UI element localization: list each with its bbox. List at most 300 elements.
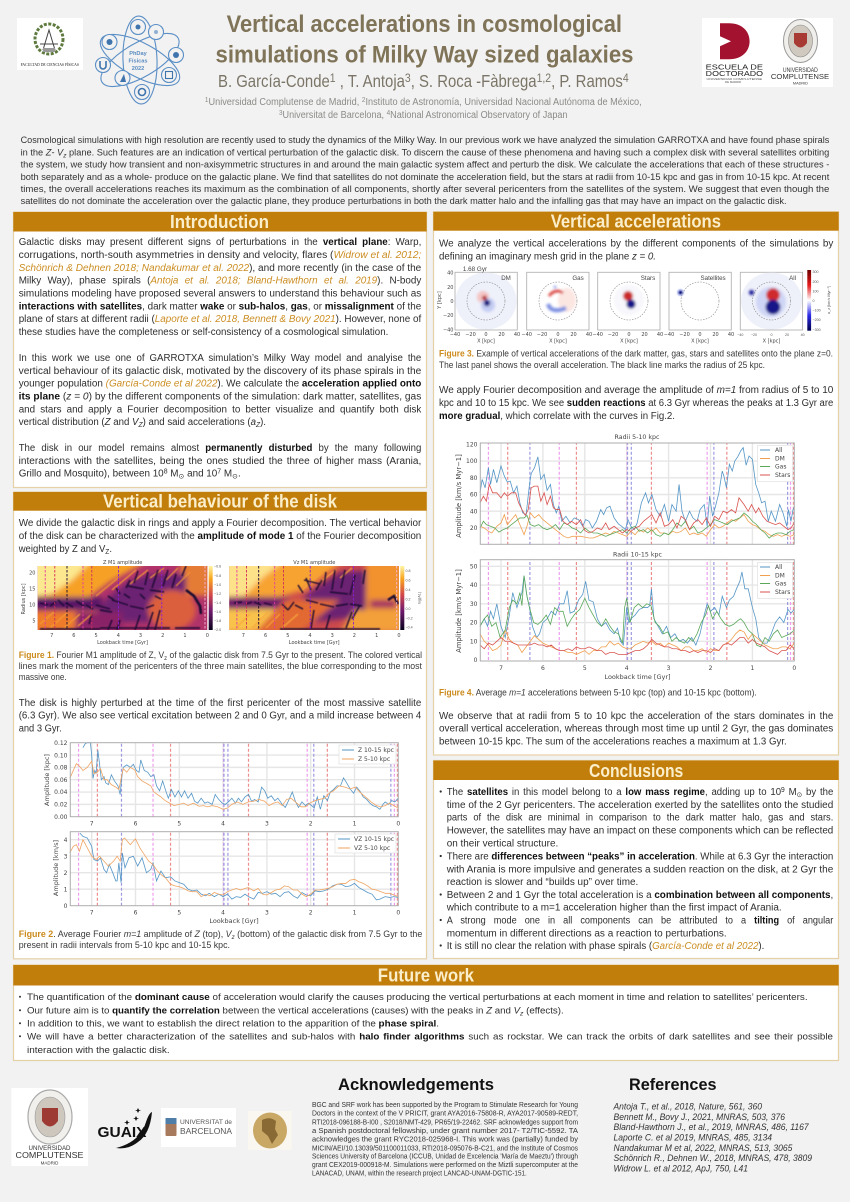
title, axes and colorbar: −1.0: [214, 583, 221, 587]
affiliations: 2: [362, 97, 366, 104]
text: introduction paragraphs: The disk in our model remains almost permanently disturbed by the many following: [19, 443, 421, 454]
title, axes and colorbar: 2: [161, 633, 164, 639]
line chart: Radii 10-15 kpc: 50: [470, 564, 478, 570]
text: introduction paragraphs: M: [221, 469, 232, 480]
abstract: the system, we study how transient and non-axisymmetric structures in and around the main galactic system affect and perturb the disk. We calculate the accelerations that each of these structures -: [21, 160, 829, 171]
line chart: Vz amplitude: 1: [353, 910, 357, 916]
title, axes and colorbar: 1: [183, 633, 187, 639]
map: gas: Gas: [572, 275, 584, 282]
text: acknowledgements: Doctors in the context of the V PRICIT, grant AYA2016-75808-R, AYA2017-90589-REDT,: [312, 1111, 578, 1118]
logo: Universidad Complutense de Madrid: UNIVERSIDAD: [28, 1145, 71, 1152]
logo: PhDay Físicas 2022 atom: 2022: [132, 66, 144, 72]
text: introduction paragraphs: vertical distribution (Z and V: [19, 417, 139, 428]
title, axes and colorbar: 4: [117, 633, 120, 639]
authors: , S. Roca -Fàbrega: [411, 71, 537, 91]
logo: Universidad Complutense de Madrid: [11, 1088, 88, 1166]
bullets: future work: [19, 992, 833, 1056]
caption: figure 3: The last panel shows the overall acceleration. The black line marks the radius of 25 kpc.: [439, 360, 765, 370]
bullets: conclusions: 9: [781, 787, 785, 794]
authors: 4: [623, 71, 629, 85]
heading: future work: [13, 965, 839, 986]
abstract: plane. Such features are an indication of vertical perturbation of the galactic disk. To discern the cause of these phenomena and having such a complex disk with several satellites orbiting: [66, 147, 829, 158]
affiliations: 4: [387, 110, 390, 117]
heading: future work: Future work: [378, 966, 475, 986]
axis labels: 0: [627, 332, 631, 338]
bullets: conclusions: on their vertical structure.: [447, 838, 558, 849]
line chart: Z amplitude: 0.12: [54, 740, 68, 747]
text: acknowledgements: MICIN/AEI/10.13039/501100011033, RTI2018-095076-B-C21, and the Institute of Cosmos: [312, 1145, 578, 1152]
title, axes and colorbar: 7: [242, 633, 245, 639]
title, axes and colorbar: 2: [353, 633, 356, 639]
text: introduction paragraphs: Grillo and Mosquito), between 10: [19, 469, 165, 480]
logo: Universidad Complutense de Madrid: MADRID: [41, 1160, 59, 1166]
title, axes and colorbar: 0.4: [406, 588, 410, 592]
axis labels: 40: [801, 333, 805, 337]
line chart: Radii 10-15 kpc: 5: [583, 665, 587, 672]
legend: [335, 834, 396, 853]
line chart: Z amplitude: 1: [353, 820, 357, 828]
abstract: [21, 135, 830, 207]
text: disk perturbation paragraph: (6.3 Gyr). We also see vertical excitation between 2 and 0 Gyr, and a mild increase between 4: [19, 711, 422, 722]
text: vertical behaviour intro: .: [109, 544, 112, 555]
line chart: Z amplitude: 3: [265, 820, 269, 828]
title, axes and colorbar: −0.6: [214, 564, 221, 568]
axis labels: 0: [556, 332, 560, 338]
line chart: Z amplitude: 0.08: [54, 764, 68, 772]
title, axes and colorbar: 5: [32, 618, 36, 624]
line chart: Radii 5-10 kpc: Radii 5-10 kpc: [614, 434, 660, 441]
line chart: Vz amplitude: 1: [64, 886, 68, 894]
map: satellites: Satellites: [700, 275, 726, 282]
abstract: z: [62, 152, 67, 159]
abstract: Cosmological simulations with high resolution are recently used to study the dynamics of the Milky Way. In our previous work we have analyzed the simulation GARROTXA and have found phase spirals: [21, 135, 829, 146]
line chart: Vz amplitude: 3: [265, 910, 269, 916]
line chart: Radii 5-10 kpc: 100: [466, 458, 478, 465]
title, axes and colorbar: −1.8: [214, 619, 221, 623]
logo: Universidad Complutense de Madrid: COMPLUTENSE: [16, 1150, 84, 1160]
title: Vertical accelerations in cosmological: [227, 11, 622, 38]
line chart: Z amplitude: Amplitude [kpc]: [43, 754, 51, 806]
legend: Gas: [775, 464, 786, 470]
line chart: Z amplitude: 0.00: [54, 814, 68, 821]
colorbar: −200: [812, 318, 821, 322]
affiliations: [205, 97, 642, 121]
line chart: Z amplitude: 0: [396, 820, 400, 828]
title, axes and colorbar: 6: [72, 633, 75, 639]
line chart: Radii 10-15 kpc: 1: [750, 665, 754, 672]
text: acknowledgements: grant CEX2019-000918-M. Simulations were performed on the Miztli supercomputer at the: [312, 1162, 578, 1169]
line chart: Z amplitude: 0.10: [54, 752, 68, 760]
legend: DM: [775, 456, 785, 462]
text: radii observation paragraph: between 10-15 kpc. The sum of the accelerations reaches a maximum at 1.3 Gyr.: [439, 737, 787, 748]
text: accelerations intro: [439, 238, 833, 262]
bullets: conclusions: reaction is slower and “builds up” over time.: [447, 877, 638, 888]
axis labels: −40: [443, 328, 454, 334]
heatmap: Vz M1 amplitude: [220, 560, 422, 646]
text: introduction paragraphs: younger population (García-Conde et al 2022). We calculate the acceleration applied onto: [19, 379, 421, 390]
caption: figure 1: z: [164, 655, 167, 662]
colorbar: 100: [812, 290, 818, 294]
title, axes and colorbar: 4: [308, 633, 312, 639]
text: acknowledgements: RTI2018-096188-B-I00 , S2018/NMT-429, PR65/19-22462. SRF acknowledges support from: [312, 1119, 578, 1126]
bullets: conclusions: The satellites in this model belong to a low mass regime, adding up to 10: [447, 787, 784, 798]
authors: , T. Antoja: [336, 71, 405, 91]
line chart: Z amplitude: 0.02: [54, 802, 68, 808]
axis labels: 40: [728, 332, 734, 338]
text: Fourier decomposition paragraph: [439, 385, 834, 422]
colorbar: 200: [812, 280, 818, 284]
abstract: satellites do not dominate the acceleration over the galactic plane, they produce perturbations in both the dark matter halo and the infalling gas that may have an impact on the galactic disk.: [21, 196, 787, 207]
title, axes and colorbar: 0.2: [406, 598, 410, 602]
title, axes and colorbar: −1.4: [214, 601, 221, 605]
text: radii observation paragraph: [439, 711, 834, 748]
text: introduction paragraphs: corrugations, north-south asymmetries in density and velocity, flares ( Widrow et al. 2012;: [19, 250, 422, 261]
logo: Universitat de Barcelona: UNIVERSITAT de: [180, 1119, 232, 1126]
title, axes and colorbar: Lookback time [Gyr]: [289, 640, 340, 646]
line chart: Vz amplitude: Lookback [Gyr]: [209, 917, 259, 925]
bullets: conclusions: with Arania is more impulsive and generates a sudden reaction on the disk, at 2 Gyr the: [446, 864, 834, 875]
bullets: future work: (effects).: [523, 1006, 564, 1016]
text: introduction paragraphs: Schönrich & Dehnen 2018; Nandakumar et al. 2022), and more recently (in the case of the: [19, 263, 422, 274]
logo: PhDay Físicas 2022 atom: [93, 15, 187, 105]
text: introduction paragraphs: plane of stars at different radii (Laporte et al. 2018, Bennett & Bovy 2021). However, none of: [19, 314, 422, 325]
pericenter lines: [45, 566, 205, 630]
abstract: times, the overall accelerations reaches its maximum as the combination of all components, shortly after several pericenters from the satellites of the system. We suggest that even though the: [21, 184, 829, 195]
text: introduction paragraphs: ⊙: [179, 474, 184, 481]
legend: [758, 562, 792, 598]
bullets: future work: z: [519, 1010, 524, 1018]
axis labels: −20: [537, 332, 547, 338]
caption: figure 2: present in radii intervals from 5-10 kpc and 10-15 kpc.: [19, 940, 230, 950]
bullets: future work: We will have a better characterization of the satellites and sub-halos with halo finder algorithms such as rockstar. We can track the orbits of dark satellites and see their possible: [27, 1032, 833, 1042]
line chart: Z amplitude: 0.06: [54, 777, 68, 784]
title, axes and colorbar: 6: [264, 633, 267, 639]
map: all: All: [789, 275, 796, 282]
affiliations: Universidad Complutense de Madrid,: [208, 97, 362, 108]
colorbar: 0: [812, 299, 814, 303]
title, axes and colorbar: 3: [331, 633, 334, 639]
axis labels: −40: [664, 332, 674, 338]
axis labels: −40: [521, 332, 532, 338]
legend: Z 5-10 kpc: [358, 756, 390, 763]
list: references: Schönrich R., Dehnen W., 2018, MNRAS, 478, 3809: [614, 1152, 813, 1163]
map: all: [740, 272, 803, 330]
title, axes and colorbar: −0.8: [214, 574, 221, 578]
axis labels: 20: [641, 332, 648, 338]
text: acknowledgements: [312, 1102, 579, 1178]
panel: introduction: [13, 212, 427, 488]
logo: PhDay Físicas 2022 atom: PhDay: [129, 51, 148, 57]
title, axes and colorbar: 1: [375, 633, 378, 639]
line chart: Vz amplitude: 3: [64, 854, 68, 860]
panel: future work: [13, 965, 839, 1060]
axis labels: [437, 266, 805, 344]
text: disk perturbation paragraph: and 3 Gyr.: [19, 724, 62, 735]
text: introduction paragraphs: ) and said accelerations (: [143, 417, 251, 428]
text: introduction paragraphs: 7: [217, 469, 221, 476]
axis labels: 1.68 Gyr: [463, 266, 487, 273]
map: stars: Stars: [641, 275, 655, 282]
title, axes and colorbar: Vz M1 amplitude: [293, 560, 335, 566]
axis labels: 20: [498, 332, 505, 338]
line chart: Radii 10-15 kpc: [455, 552, 796, 681]
axis labels: 40: [657, 332, 663, 338]
bullets: conclusions: M: [785, 787, 797, 798]
line chart: Vz amplitude: [52, 832, 400, 925]
heading: acknowledgements: Acknowledgements: [338, 1075, 494, 1094]
line chart: Vz amplitude: 7: [90, 910, 94, 916]
affiliations: National Astronomical Observatory of Japan: [390, 110, 568, 121]
text: acknowledgements: acknowledges the grant RYC2018-025968-I. This work was (partially) funded by: [312, 1137, 579, 1144]
heading: conclusions: Conclusions: [589, 761, 683, 781]
text: Fourier decomposition paragraph: kpc and 10 to 15 kpc. We see sudden reactions at 6.3 Gyr whereas the peaks at 1.3 Gyr are: [439, 398, 834, 409]
heading: introduction: Introduction: [170, 212, 269, 232]
logos: Escuela de Doctorado and Universidad Complutense: UNIVERSIDAD COMPLUTENSE: [706, 77, 762, 81]
axis labels: X [kpc]: [691, 338, 709, 344]
text: introduction paragraphs: and stars and apply a Fourier decomposition to better visualize and quantify both disk: [19, 404, 422, 415]
caption: figure 2: Figure 2. Average Fourier m=1 amplitude of Z (top), V: [19, 929, 232, 939]
heading: references: References: [629, 1075, 716, 1094]
legend: All: [775, 447, 783, 454]
text: vertical behaviour intro: We divide the galactic disk in rings and apply a Fourier decomposition. The vertical behavior: [19, 518, 422, 529]
line chart: Z amplitude: 2: [309, 820, 313, 828]
axis labels: Y [kpc]: [437, 291, 443, 310]
axis labels: 20: [447, 285, 454, 291]
text: introduction paragraphs: Z: [138, 422, 143, 429]
line chart: Radii 10-15 kpc: Radii 10-15 kpc: [613, 552, 663, 558]
bullets: conclusions: ⊙: [797, 792, 802, 799]
title, axes and colorbar: 0.0: [406, 607, 410, 611]
line chart: Radii 10-15 kpc: 7: [499, 665, 503, 672]
authors: 3: [405, 71, 411, 85]
colorbar: −300: [812, 328, 821, 332]
text: introduction paragraphs: Galactic disks may present different signs of perturbations in the vertical plane: Warp,: [19, 237, 421, 248]
line chart: Radii 5-10 kpc: 80: [470, 475, 478, 482]
list: references: Nandakumar M et al, 2022, MNRAS, 513, 3065: [614, 1142, 793, 1153]
axis labels: −20: [751, 333, 757, 337]
text: disk perturbation paragraph: The disk is highly perturbed at the time of the first pericenter of the most massive satellite: [19, 698, 422, 709]
text: introduction paragraphs: [19, 237, 422, 481]
colorbar: a_z [km/s Myr⁻¹]: [827, 286, 831, 314]
line chart: Radii 5-10 kpc: 120: [466, 442, 478, 448]
abstract: both separately and as a whole- produce on the galactic plane. We find that satellites do not dominate the acceleration field, but the stars at radii from 10-15 kpc and gas in from 10-15 kpc. At recent: [21, 172, 830, 183]
line chart: Vz amplitude: 4: [221, 910, 225, 916]
axis labels: −20: [679, 332, 690, 338]
line chart: Radii 10-15 kpc: 40: [470, 582, 478, 589]
text: disk perturbation paragraph: [19, 698, 422, 735]
affiliations: Instituto de Astronomía, Universidad Nacional Autónoma de México,: [365, 97, 642, 108]
colorbar: [807, 270, 831, 332]
caption: figure 2: z: [231, 934, 235, 941]
line chart: Z amplitude: [43, 740, 400, 828]
title, axes and colorbar: 0.6: [406, 578, 410, 582]
caption: figure 4: Figure 4. Average m=1 accelerations between 5-10 kpc (top) and 10-15 kpc (bottom).: [439, 688, 757, 698]
title, axes and colorbar: −0.2: [406, 616, 413, 620]
map: DM: DM: [501, 275, 511, 282]
map: stars: [598, 272, 660, 330]
text: introduction paragraphs: Milky Way), phase spirals (Antoja et al. 2018; Bland-Hawthorn et al. 2019). N-body: [19, 276, 421, 287]
affiliations: 3: [279, 110, 283, 117]
affiliations: 1: [205, 97, 209, 104]
line chart: Vz amplitude: 2: [64, 870, 68, 877]
heading: vertical behaviour: [13, 492, 427, 512]
authors: , P. Ramos: [551, 71, 623, 91]
text: Fourier decomposition paragraph: We apply Fourier decomposition and average the amplitude of m=1 from radius of 5 to 10: [439, 385, 834, 396]
legend: Stars: [775, 589, 790, 596]
title, axes and colorbar: Lookback time [Gyr]: [97, 640, 148, 646]
line chart: Vz amplitude: 4: [64, 837, 68, 844]
title, axes and colorbar: Radius [kpc]: [21, 583, 27, 615]
list: references: Bennett M., Bovy J., 2021, MNRAS, 503, 376: [614, 1111, 786, 1122]
logo: Universitat de Barcelona: BARCELONA: [180, 1127, 233, 1136]
text: introduction paragraphs: interactions with satellites, dark matter wake or sub-halos, gas, or missalignment of the: [19, 301, 422, 312]
text: introduction paragraphs: ⊙: [232, 474, 238, 481]
axis labels: 0: [770, 333, 772, 337]
line chart: Vz amplitude: 5: [177, 910, 181, 916]
title, axes and colorbar: 0.8: [406, 569, 410, 573]
title, axes and colorbar: 0: [397, 633, 401, 639]
heading: conclusions: [433, 760, 839, 781]
axis labels: X [kpc]: [477, 338, 495, 344]
axis labels: 20: [712, 332, 719, 338]
line chart: Vz amplitude: Amplitude [km/s]: [52, 840, 60, 896]
heading: vertical accelerations: [433, 212, 839, 232]
maps: figure 3 acceleration panels: [437, 266, 831, 344]
axis labels: −40: [737, 333, 743, 337]
line chart: Vz amplitude: 6: [134, 910, 138, 916]
caption: figure 1: Figure 1. Fourier M1 amplitude of Z, V: [19, 650, 173, 660]
text: introduction paragraphs: ).: [260, 417, 266, 428]
axis labels: 20: [785, 333, 789, 337]
caption: figure 2: [19, 929, 422, 950]
logo: Facultad de Ciencias Físicas: FACULTAD DE CIENCIAS FÍSICAS: [21, 62, 80, 67]
pericenter lines: [237, 566, 397, 630]
list: references: Bland-Hawthorn J., et al., 2019, MNRAS, 486, 1167: [614, 1121, 809, 1132]
logos: Escuela de Doctorado and Universidad Complutense: DE MADRID: [725, 80, 741, 84]
title, axes and colorbar: log(A1): [418, 591, 422, 604]
axis labels: −20: [608, 332, 618, 338]
logos: Escuela de Doctorado and Universidad Complutense: [702, 18, 833, 87]
text: introduction paragraphs: its plane (z = 0) by the different components of the simulation: dark matter, satellites, gas: [19, 391, 421, 402]
text: accelerations intro: defining an imaginary mesh grid in the plane z = 0.: [439, 252, 656, 262]
axis labels: −20: [465, 332, 476, 338]
caption: figure 1: [19, 650, 422, 682]
title, axes and colorbar: 5: [286, 633, 289, 639]
line chart: Radii 10-15 kpc: 4: [625, 665, 629, 672]
axis labels: 40: [586, 332, 592, 338]
axis labels: X [kpc]: [549, 338, 567, 344]
colorbar: 300: [812, 270, 818, 274]
title: [216, 11, 634, 68]
map: satellites: [669, 272, 731, 330]
axis labels: −20: [443, 313, 454, 319]
text: introduction paragraphs: and 10: [184, 469, 218, 480]
legend: Gas: [775, 580, 786, 588]
text: introduction paragraphs: interactions with the satellites, being the ones studied the three of higher mass (Arania,: [19, 456, 421, 467]
logo: PhDay Físicas 2022 atom: Físicas: [129, 58, 147, 64]
text: introduction paragraphs: Z: [255, 422, 261, 429]
title, axes and colorbar: 0: [206, 633, 209, 639]
title, axes and colorbar: −1.6: [214, 610, 221, 614]
line chart: Radii 5-10 kpc: Amplitude [km/s Myr−1]: [455, 454, 463, 538]
line chart: Z amplitude: 7: [90, 820, 94, 828]
text: introduction paragraphs: these studies have the completeness or self-consistency of a cosmological simulation.: [19, 327, 388, 338]
bullets: conclusions: It is still no clear the relation with phase spirals (García-Conde et al 2022).: [447, 941, 764, 952]
bullets: conclusions: parts of the disk are minimal in comparison to the dark matter halo, gas and stars.: [447, 813, 833, 824]
authors: 1: [330, 71, 336, 85]
bullets: conclusions: Between 2 and 1 Gyr the total acceleration is a combination between all components,: [447, 890, 833, 901]
line chart: Z amplitude: 5: [177, 820, 181, 828]
text: acknowledgements: BGC and SRF work has been supported by the Program to Stimulate Research for Young: [312, 1102, 578, 1109]
legend: DM: [775, 572, 785, 580]
caption: figure 1: lines mark the moment of the pericenters of the three main satellites, the blue corresponding to the most: [19, 661, 422, 671]
text: vertical behaviour intro: Z: [105, 549, 110, 556]
title, axes and colorbar: 3: [139, 633, 142, 639]
bullets: future work: Our future aim is to quantify the correlation between the vertical accelerations (causes) with the peaks in Z and V: [27, 1006, 520, 1016]
authors: B. García-Conde: [218, 71, 349, 91]
text: vertical behaviour intro: weighted by Z and V: [19, 544, 110, 555]
logos: Escuela de Doctorado and Universidad Complutense: DOCTORADO: [706, 71, 764, 78]
axis labels: 20: [570, 332, 577, 338]
line chart: Radii 10-15 kpc: 3: [667, 665, 671, 672]
axis labels: 40: [514, 332, 520, 338]
text: acknowledgements: LANACAD, UNAM, within the research project LANCAD-UNAM-DGTIC-151.: [312, 1171, 527, 1178]
text: acknowledgements: Sciences University of Barcelona (ICCUB, Unidad de Excelencia 'María de Maeztu') through: [312, 1154, 578, 1161]
bullets: conclusions: However, the satellites may have an impact on these components which can be reflected: [447, 825, 833, 836]
text: introduction paragraphs: 8: [164, 469, 168, 476]
list: references: Widrow L. et al 2012, ApJ, 750, L41: [614, 1162, 748, 1174]
line chart: Radii 10-15 kpc: 30: [470, 601, 478, 608]
text: radii observation paragraph: overall vertical acceleration, whereas through most time up until 2 Gyr, the gas dominates: [439, 724, 833, 735]
legend: VZ 5-10 kpc: [354, 845, 390, 852]
text: introduction paragraphs: .: [238, 469, 241, 480]
line chart: Radii 10-15 kpc: Lookback time [Gyr]: [604, 673, 671, 681]
bullets: conclusions: by the: [802, 787, 834, 798]
text: acknowledgements: a Spanish postdoctoral fellowship, under grant number 2017- T2/TIC-5592. TA: [312, 1128, 578, 1135]
legend: Z 10-15 kpc: [358, 747, 394, 754]
title, axes and colorbar: [242, 560, 422, 646]
line chart: Radii 10-15 kpc: Amplitude [km/s Myr−1]: [455, 569, 463, 653]
list: references: Laporte C. et al 2019, MNRAS, 485, 3134: [614, 1132, 772, 1142]
panel: conclusions: [433, 760, 839, 958]
axis labels: 0: [698, 332, 702, 338]
legend: [758, 446, 792, 482]
heatmap: Z M1 amplitude: [21, 560, 221, 646]
title, axes and colorbar: 7: [50, 633, 53, 639]
logo: GUAIX: [98, 1108, 152, 1148]
text: introduction paragraphs: a: [251, 417, 256, 428]
legend: VZ 10-15 kpc: [354, 836, 394, 843]
panel: vertical accelerations: [433, 212, 839, 755]
line chart: Radii 10-15 kpc: 0: [792, 665, 796, 672]
bullets: future work: interaction with the galactic disk.: [27, 1045, 170, 1056]
text: vertical behaviour intro: of the disk can be characterized with the amplitude of mode 1 of the Fourier decomposition: [19, 531, 421, 542]
line chart: Z amplitude: 6: [134, 820, 138, 828]
text: accelerations intro: We analyze the vertical accelerations by the different components of the simulations by: [439, 238, 833, 250]
heading: vertical behaviour: Vertical behaviour of the disk: [103, 492, 338, 512]
text: introduction paragraphs: In this work we use one of GARROTXA simulation’s Milky Way model and analyise the: [19, 353, 422, 364]
bullets: future work: In addition to this, we want to establish the direct relation to the apparition of the phase spiral.: [27, 1018, 439, 1030]
axis labels: 0: [484, 332, 488, 338]
caption: figure 3: [439, 349, 833, 370]
logos: Escuela de Doctorado and Universidad Complutense: ESCUELA DE: [706, 64, 763, 72]
line chart: Radii 5-10 kpc: 60: [470, 492, 478, 498]
line chart: Z amplitude: 4: [221, 820, 225, 828]
bullets: conclusions: momentum in different directions as a reaction to perturbations.: [447, 928, 727, 939]
line chart: Radii 10-15 kpc: 10: [470, 638, 478, 646]
map: DM: [455, 272, 517, 330]
colorbar: −100: [812, 308, 821, 312]
